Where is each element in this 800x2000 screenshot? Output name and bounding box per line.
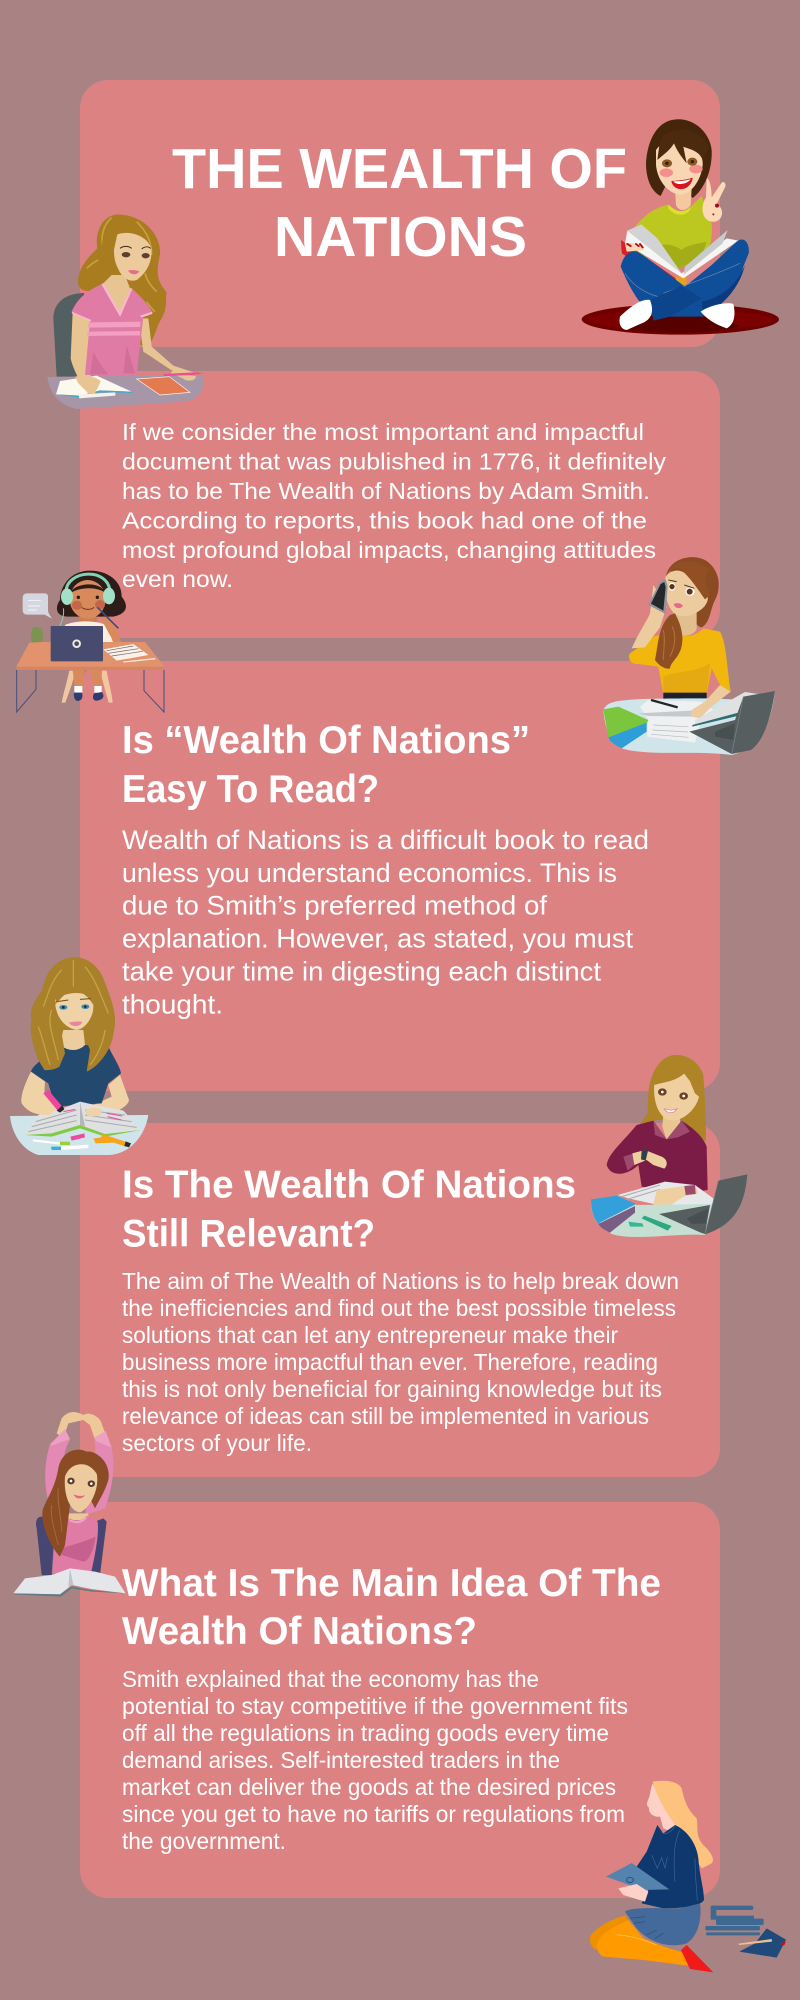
illustration: woman kneeling with tablet and books (590, 1781, 786, 1972)
illustration: woman reading on red rug (582, 119, 779, 335)
body text: easy to read: due to Smith’s preferred method of (122, 890, 548, 920)
intro text: even now. (122, 566, 233, 592)
heading: main idea: What Is The Main Idea Of The (122, 1562, 661, 1605)
body text: main idea: since you get to have no tariffs or regulations from (122, 1801, 625, 1827)
intro text (122, 419, 667, 592)
body text: easy to read: explanation. However, as stated, you must (122, 924, 633, 954)
body text: still relevant: solutions that can let any entrepreneur make their (122, 1322, 618, 1348)
body text: still relevant: this is not only beneficial for gaining knowledge but its (122, 1376, 662, 1402)
panel: still relevant (80, 1123, 720, 1477)
body text: main idea: off all the regulations in trading goods every time (122, 1720, 609, 1746)
heading: still relevant (122, 1164, 576, 1256)
heading: easy to read (122, 719, 530, 811)
body text: main idea: Smith explained that the economy has the (122, 1666, 539, 1692)
body text: main idea (122, 1666, 628, 1854)
intro text: According to reports, this book had one of the (122, 508, 647, 534)
body text: main idea: demand arises. Self-interested traders in the (122, 1747, 560, 1773)
body text: easy to read: Wealth of Nations is a difficult book to read (122, 825, 649, 855)
illustration: woman on the phone with laptop (603, 557, 775, 755)
title: THE WEALTH OF (172, 137, 627, 201)
title: NATIONS (274, 205, 527, 269)
body text: still relevant: The aim of The Wealth of Nations is to help break down (122, 1268, 679, 1294)
body text: still relevant: relevance of ideas can still be implemented in various (122, 1403, 649, 1429)
heading: still relevant: Is The Wealth Of Nations (122, 1164, 576, 1206)
heading: still relevant: Still Relevant? (122, 1212, 375, 1256)
heading: easy to read: Is “Wealth Of Nations” (122, 719, 530, 762)
illustration: woman checking watch with laptop (591, 1055, 747, 1237)
panel: main idea (80, 1502, 720, 1898)
intro text: If we consider the most important and impactful (122, 419, 644, 445)
body text: still relevant (122, 1268, 679, 1456)
body text: still relevant: the inefficiencies and find out the best possible timeless (122, 1295, 676, 1321)
body text: still relevant: business more impactful than ever. Therefore, reading (122, 1349, 658, 1375)
title (172, 137, 627, 269)
illustration: woman writing at desk (47, 214, 204, 409)
body text: easy to read: unless you understand economics. This is (122, 858, 617, 888)
panel: easy to read (80, 661, 720, 1091)
body text: easy to read (122, 825, 649, 1020)
illustration: woman with highlighter and book (10, 957, 148, 1155)
panel: introduction (80, 371, 720, 638)
body text: easy to read: thought. (122, 990, 223, 1020)
panel: title (80, 80, 720, 347)
body text: still relevant: sectors of your life. (122, 1430, 312, 1456)
body text: main idea: the government. (122, 1828, 286, 1854)
intro text: most profound global impacts, changing attitudes (122, 537, 656, 563)
heading: main idea: Wealth Of Nations? (122, 1610, 477, 1653)
body text: main idea: potential to stay competitive if the government fits (122, 1693, 628, 1719)
illustration: woman stretching with open book (13, 1412, 126, 1597)
heading: easy to read: Easy To Read? (122, 768, 379, 811)
illustration: girl with headphones at laptop (17, 571, 164, 712)
intro text: document that was published in 1776, it definitely (122, 448, 667, 474)
heading: main idea (122, 1562, 661, 1653)
intro text: has to be The Wealth of Nations by Adam Smith. (122, 478, 650, 504)
body text: easy to read: take your time in digesting each distinct (122, 956, 602, 986)
body text: main idea: market can deliver the goods at the desired prices (122, 1774, 616, 1800)
